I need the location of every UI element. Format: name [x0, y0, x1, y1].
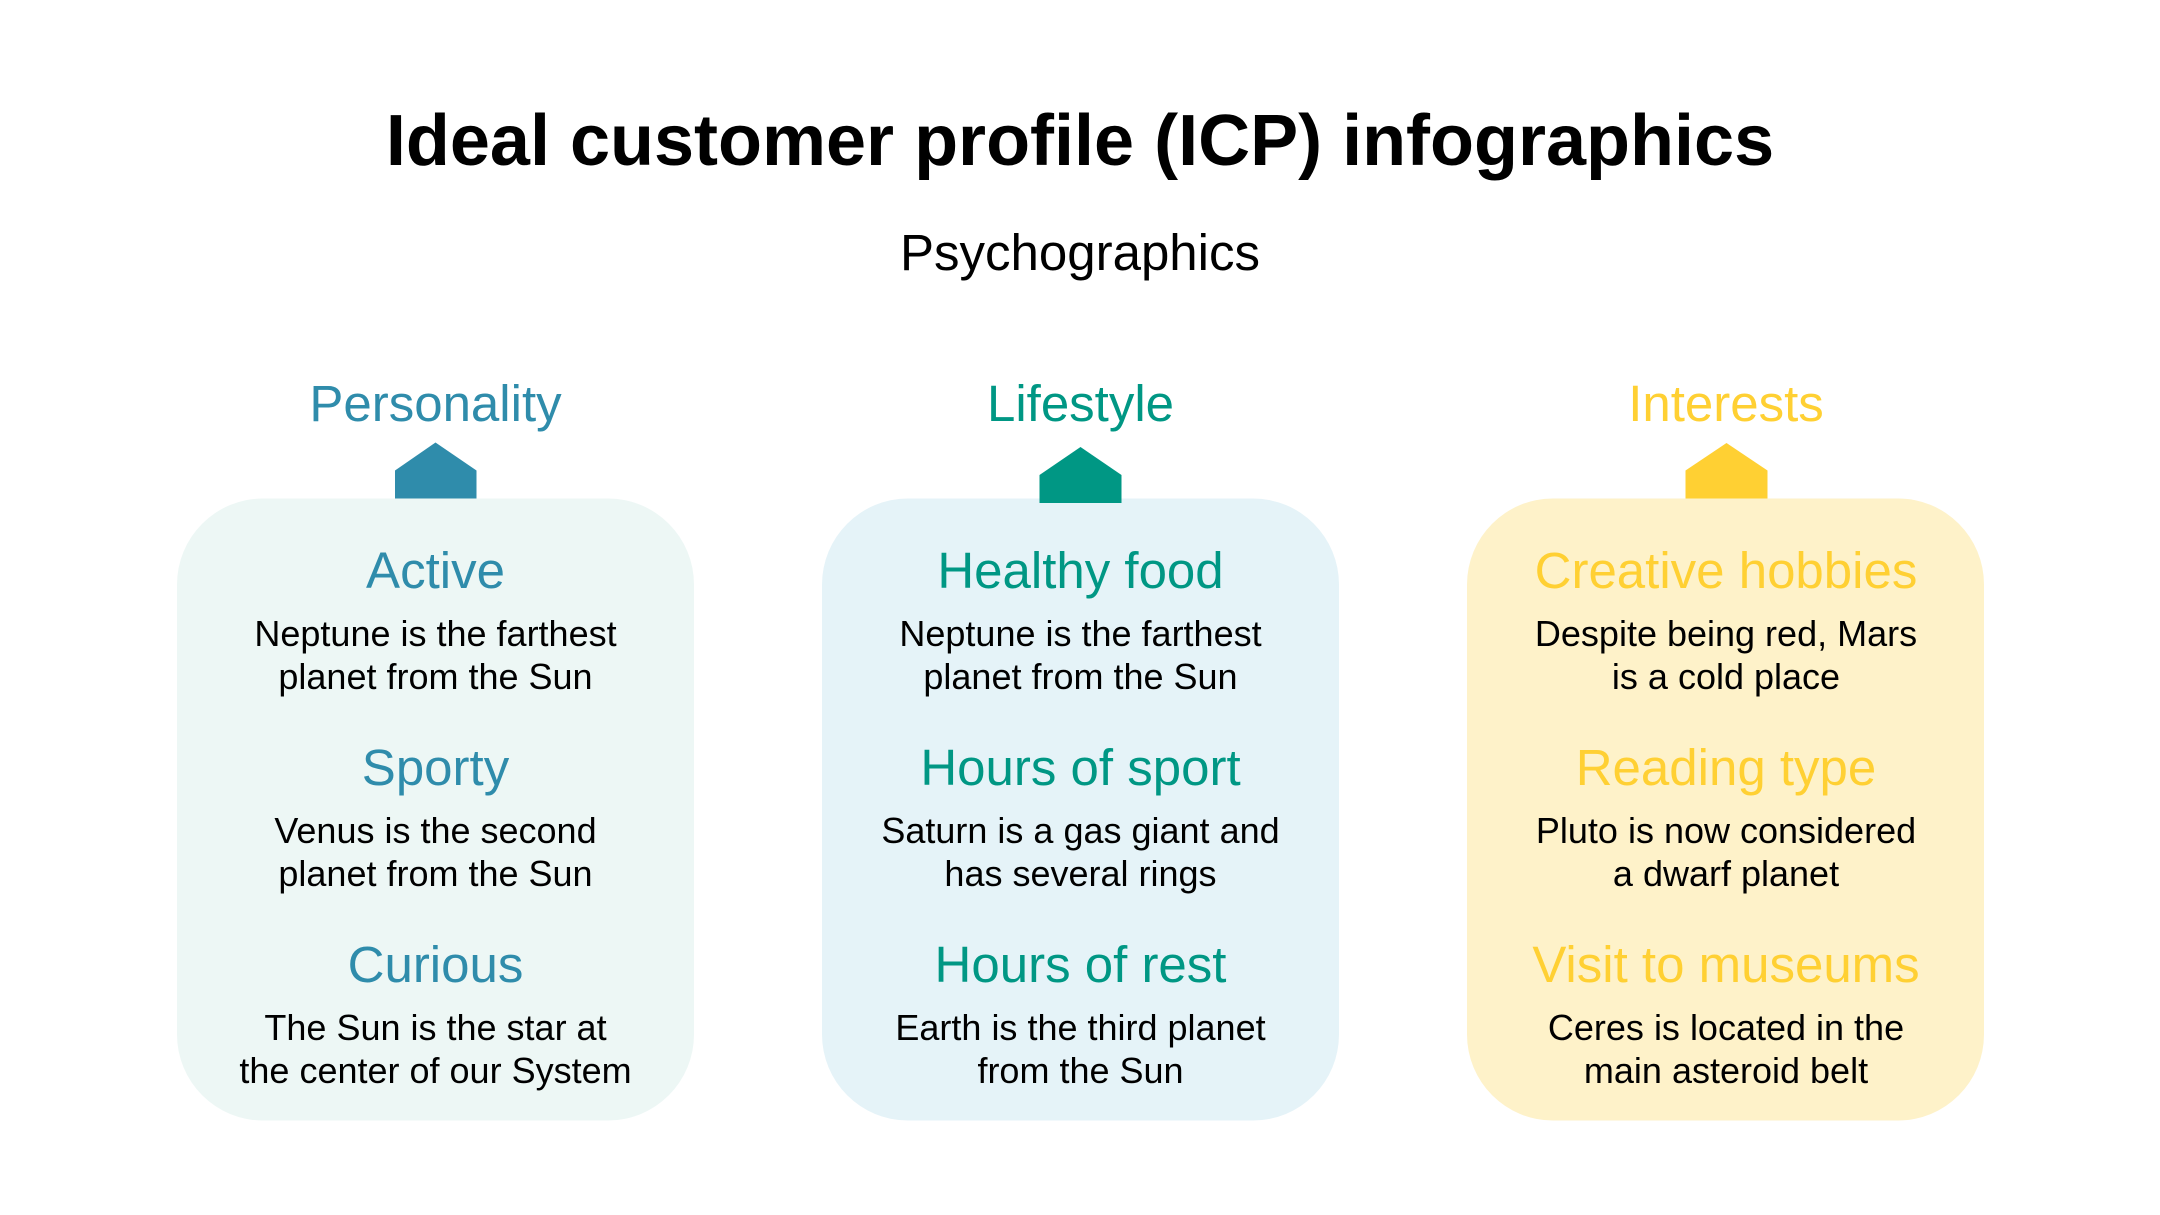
icon: interests pentagon marker — [1686, 443, 1768, 498]
item: healthy food: Healthy food — [937, 542, 1224, 599]
item: visit to museums: Visit to museums — [1532, 936, 1920, 993]
panel: lifestyle — [822, 375, 1339, 1120]
item: sporty — [274, 739, 597, 894]
item: creative hobbies: Despite being red, Mars — [1535, 613, 1917, 654]
item: healthy food: Neptune is the farthest — [899, 613, 1262, 654]
item: creative hobbies: is a cold place — [1612, 656, 1840, 697]
item: reading type — [1536, 739, 1916, 894]
item: reading type: Pluto is now considered — [1536, 810, 1916, 851]
item: hours of sport: has several rings — [944, 853, 1217, 894]
item: hours of rest: Hours of rest — [935, 936, 1226, 993]
item: visit to museums: main asteroid belt — [1584, 1050, 1868, 1091]
item: active: planet from the Sun — [278, 656, 593, 697]
subtitle: Psychographics — [900, 224, 1260, 281]
item: healthy food — [899, 542, 1262, 697]
item: active — [254, 542, 617, 697]
icon: lifestyle pentagon marker — [1040, 447, 1122, 503]
item: curious — [239, 936, 632, 1091]
item: sporty: Sporty — [362, 739, 510, 796]
item: hours of sport: Saturn is a gas giant and — [881, 810, 1280, 851]
item: sporty: Venus is the second — [274, 810, 597, 851]
item: active: Neptune is the farthest — [254, 613, 617, 654]
title: Ideal customer profile (ICP) infographics — [386, 101, 1774, 181]
item: active: Active — [366, 542, 505, 599]
item: reading type: a dwarf planet — [1613, 853, 1839, 894]
item: hours of sport — [881, 739, 1280, 894]
panel: personality — [177, 375, 694, 1120]
item: hours of sport: Hours of sport — [920, 739, 1241, 796]
item: visit to museums: Ceres is located in the — [1548, 1007, 1904, 1048]
heading: lifestyle: Lifestyle — [987, 375, 1174, 432]
item: hours of rest: from the Sun — [977, 1050, 1184, 1091]
heading: personality: Personality — [309, 375, 562, 432]
item: visit to museums — [1532, 936, 1920, 1091]
card background: lifestyle — [822, 498, 1339, 1120]
item: healthy food: planet from the Sun — [923, 656, 1238, 697]
item: curious: Curious — [348, 936, 523, 993]
card background: personality — [177, 498, 694, 1120]
item: sporty: planet from the Sun — [278, 853, 593, 894]
item: reading type: Reading type — [1576, 739, 1876, 796]
item: curious: The Sun is the star at — [264, 1007, 607, 1048]
item: creative hobbies — [1535, 542, 1917, 697]
item: hours of rest — [895, 936, 1266, 1091]
panel: interests — [1467, 375, 1984, 1120]
icon: personality pentagon marker — [395, 442, 476, 498]
item: hours of rest: Earth is the third planet — [895, 1007, 1266, 1048]
item: curious: the center of our System — [239, 1050, 632, 1091]
heading: interests: Interests — [1628, 375, 1824, 432]
item: creative hobbies: Creative hobbies — [1535, 542, 1917, 599]
card background: interests — [1467, 498, 1984, 1120]
